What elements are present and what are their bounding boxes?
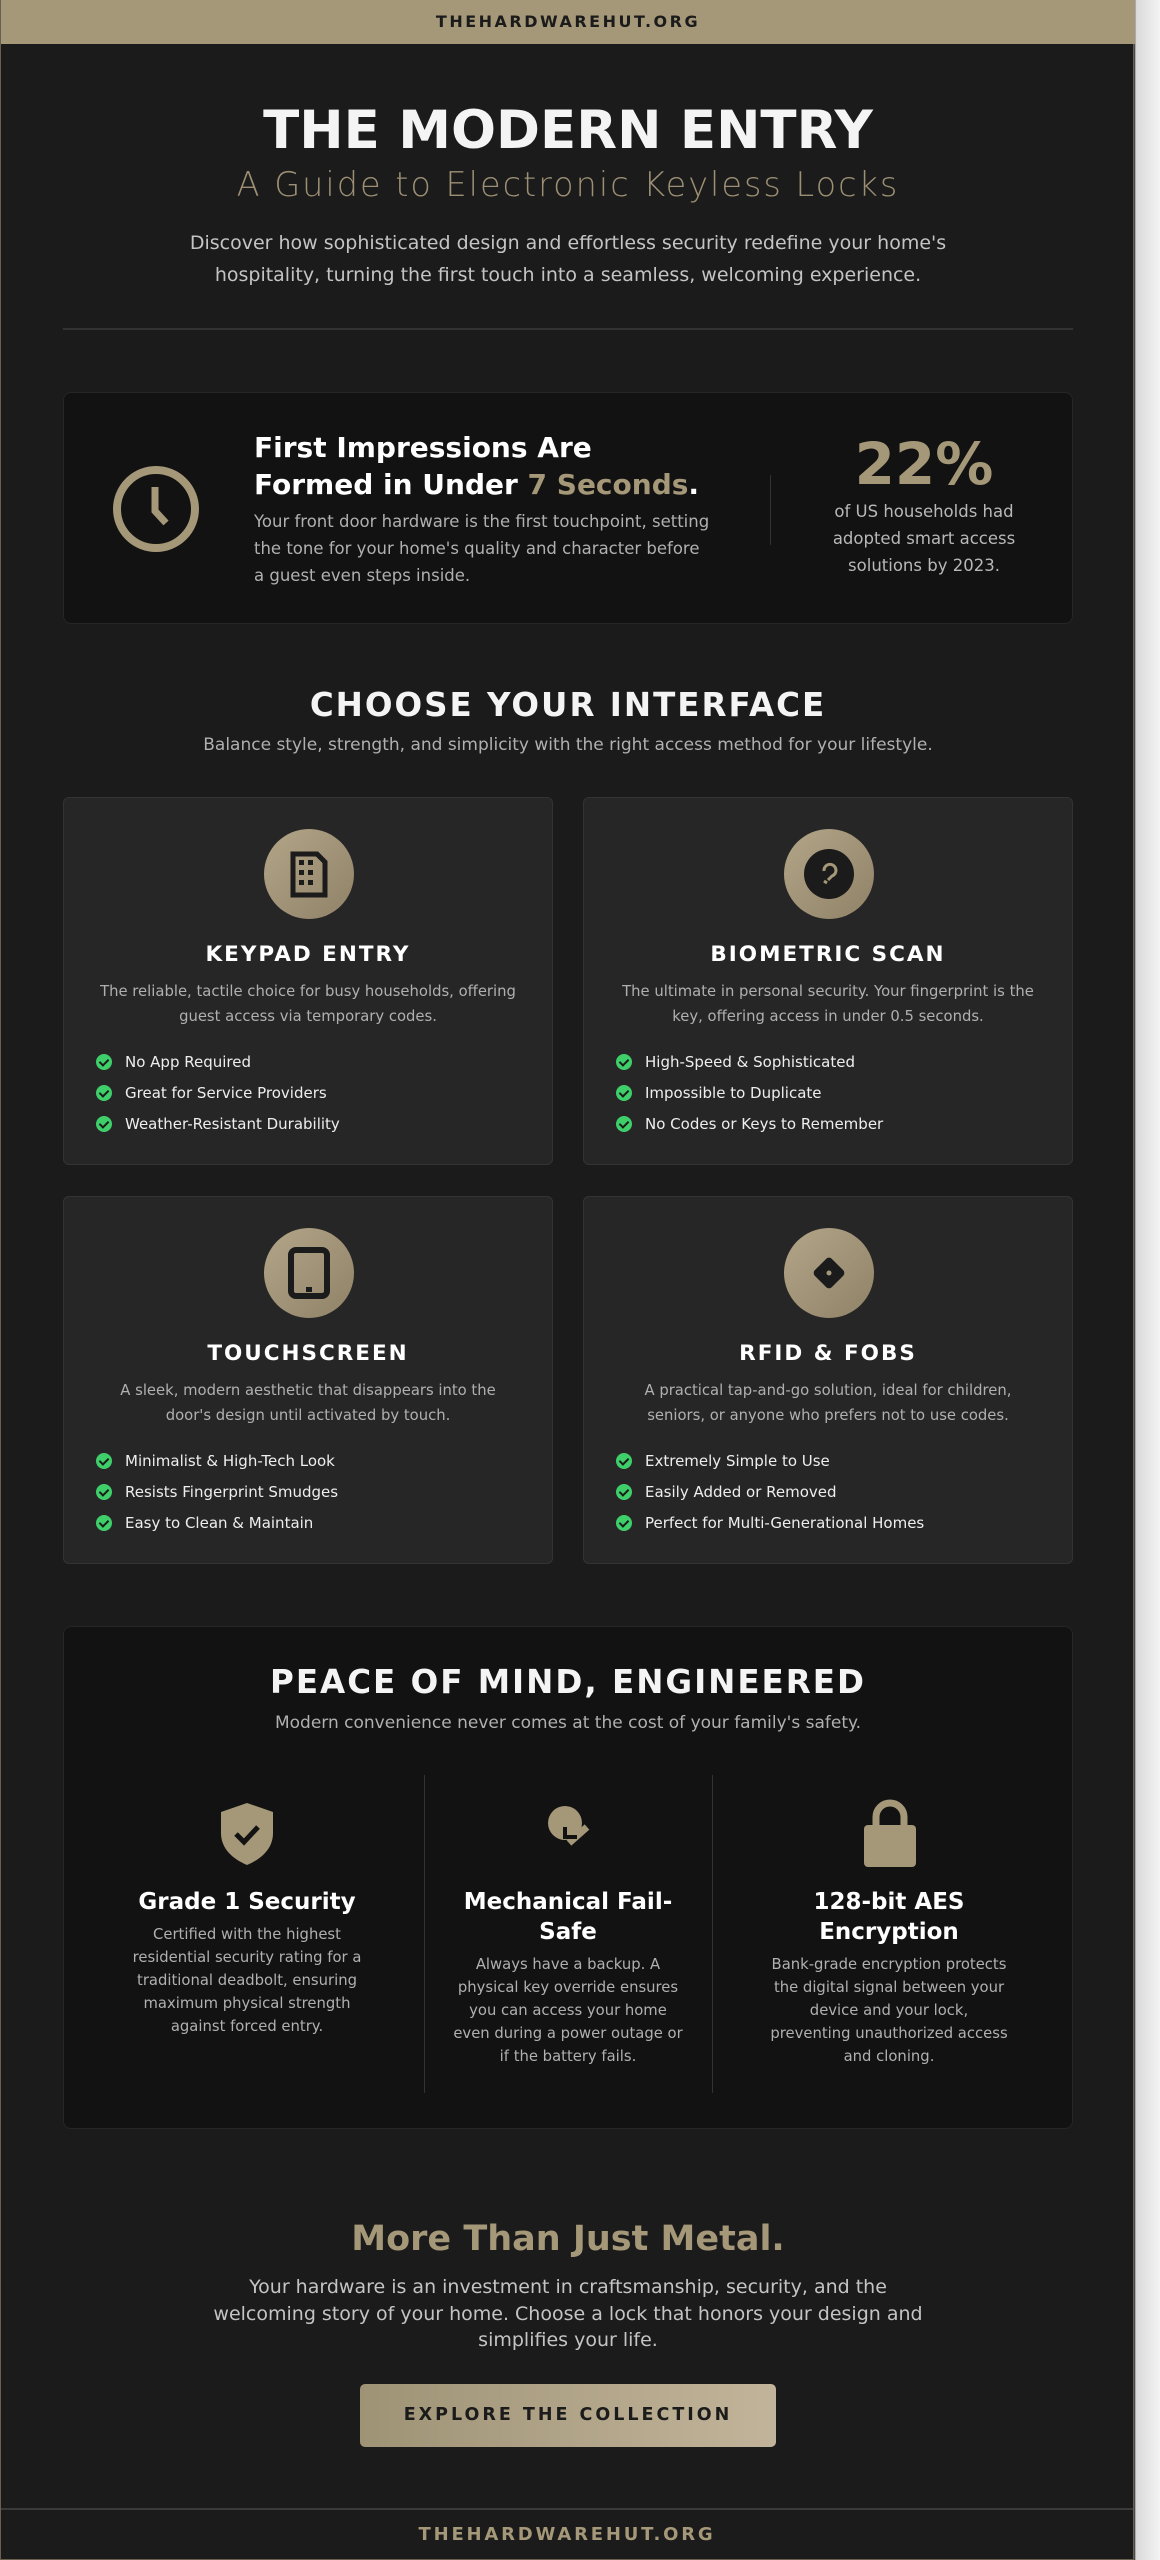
- panel: biometric: BIOMETRIC SCAN: [710, 942, 946, 967]
- panel: rfid: Extremely Simple to Use: [645, 1452, 830, 1470]
- panel: keypad: [63, 797, 553, 1165]
- footer: THEHARDWAREHUT.ORG: [419, 2524, 715, 2545]
- top bar: THEHARDWAREHUT.ORG: [436, 12, 700, 31]
- column: grade 1: Grade 1 Security: [138, 1889, 356, 1915]
- column: fail-safe: [453, 1889, 683, 2065]
- column: fail-safe: Always have a backup. A: [476, 1956, 660, 1973]
- subtitle: A Guide to Electronic Keyless Locks: [237, 165, 899, 204]
- column: fail-safe: Mechanical Fail-: [464, 1889, 672, 1915]
- panel: biometric: High-Speed & Sophisticated: [645, 1052, 855, 1070]
- subheading: Balance style, strength, and simplicity with the right access method for your lifestyle.: [203, 735, 933, 755]
- icon: shield: [221, 1803, 273, 1865]
- top bar: [1, 0, 1135, 44]
- icon: fob: [784, 1228, 874, 1318]
- panel: biometric: [583, 797, 1073, 1165]
- subheading: Modern convenience never comes at the cost of your family's safety.: [275, 1713, 861, 1733]
- button: EXPLORE THE COLLECTION: [404, 2405, 732, 2425]
- column: grade 1: traditional deadbolt, ensuring: [137, 1972, 357, 1989]
- panel: touchscreen: A sleek, modern aesthetic that disappears into the: [120, 1382, 496, 1399]
- heading: choose: CHOOSE YOUR INTERFACE: [310, 686, 826, 724]
- panel: biometric: Impossible to Duplicate: [645, 1084, 822, 1102]
- panel: keypad: The reliable, tactile choice for busy households, offering: [100, 983, 516, 1000]
- panel: biometric: No Codes or Keys to Remember: [645, 1114, 883, 1132]
- column: encryption: and cloning.: [844, 2048, 934, 2065]
- column: fail-safe: Safe: [539, 1919, 597, 1945]
- panel: keypad: Great for Service Providers: [125, 1084, 327, 1102]
- column: encryption: [770, 1889, 1008, 2065]
- panel: biometric: key, offering access in under 0.5 seconds.: [672, 1008, 984, 1025]
- column: encryption: Encryption: [819, 1919, 959, 1945]
- column: encryption: 128-bit AES: [814, 1889, 964, 1915]
- icon: key override: [548, 1806, 590, 1846]
- column: fail-safe: even during a power outage or: [453, 2025, 683, 2042]
- column: grade 1: residential security rating for a: [133, 1949, 361, 1966]
- heading: [254, 431, 699, 501]
- panel: touchscreen: Easy to Clean & Maintain: [125, 1514, 313, 1532]
- panel: rfid: Easily Added or Removed: [645, 1482, 837, 1500]
- column: fail-safe: you can access your home: [469, 2002, 667, 2019]
- intro text: Discover how sophisticated design and effortless security redefine your home's hospitality, turning the first touch into a seamless, welcoming experience.: [190, 232, 946, 286]
- stat caption: of US households had adopted smart access solutions by 2023.: [833, 502, 1015, 575]
- column: grade 1: against forced entry.: [171, 2018, 323, 2035]
- panel: biometric: The ultimate in personal security. Your fingerprint is the: [622, 983, 1034, 1000]
- column: fail-safe: if the battery fails.: [500, 2048, 636, 2065]
- panel: first impressions stat: [63, 392, 1073, 624]
- panel: peace of mind: [63, 1626, 1073, 2129]
- panel: rfid: RFID & FOBS: [739, 1341, 917, 1366]
- panel: touchscreen: TOUCHSCREEN: [207, 1341, 409, 1366]
- column: encryption: Bank-grade encryption protects: [772, 1956, 1006, 1973]
- panel: keypad: KEYPAD ENTRY: [206, 942, 410, 967]
- column: grade 1: maximum physical strength: [144, 1995, 350, 2012]
- panel: keypad: guest access via temporary codes.: [179, 1008, 437, 1025]
- heading: Formed in Under 7 Seconds.: [254, 468, 699, 501]
- footer: [1, 2508, 1133, 2560]
- heading: First Impressions Are: [254, 431, 592, 464]
- icon: tablet: [264, 1228, 354, 1318]
- column: encryption: preventing unauthorized access: [770, 2025, 1008, 2042]
- panel: rfid: seniors, or anyone who prefers not to use codes.: [647, 1407, 1009, 1424]
- stat 22%: 22%: [855, 430, 993, 498]
- panel: touchscreen: Minimalist & High-Tech Look: [125, 1452, 335, 1470]
- panel: touchscreen: Resists Fingerprint Smudges: [125, 1482, 338, 1500]
- column: grade 1: [133, 1889, 361, 2035]
- icon: fingerprint: [784, 829, 874, 919]
- heading: more than metal: More Than Just Metal.: [351, 2219, 785, 2259]
- title: THE MODERN ENTRY: [263, 100, 873, 161]
- heading: PEACE OF MIND, ENGINEERED: [270, 1663, 866, 1701]
- icon: clock: [113, 466, 199, 552]
- icon: keypad: [264, 829, 354, 919]
- button: [360, 2384, 776, 2447]
- panel: keypad: Weather-Resistant Durability: [125, 1114, 340, 1132]
- icon: padlock: [864, 1800, 916, 1867]
- text: Your front door hardware is the first touchpoint, setting the tone for your home's quality and character before a guest even steps inside.: [254, 512, 709, 585]
- closing text: Your hardware is an investment in craftsmanship, security, and the welcoming story of your home. Choose a lock that honors your design and simplifies your life.: [213, 2276, 923, 2351]
- panel: rfid: Perfect for Multi-Generational Homes: [645, 1514, 924, 1532]
- column: encryption: the digital signal between your: [774, 1979, 1004, 1996]
- column: grade 1: Certified with the highest: [153, 1926, 341, 1943]
- panel: touchscreen: [63, 1196, 553, 1564]
- column: encryption: device and your lock,: [810, 2002, 968, 2019]
- column: fail-safe: physical key override ensures: [458, 1979, 678, 1996]
- panel: rfid: A practical tap-and-go solution, ideal for children,: [644, 1382, 1011, 1399]
- panel: keypad: No App Required: [125, 1052, 251, 1070]
- panel: rfid: [583, 1196, 1073, 1564]
- panel: touchscreen: door's design until activated by touch.: [166, 1407, 450, 1424]
